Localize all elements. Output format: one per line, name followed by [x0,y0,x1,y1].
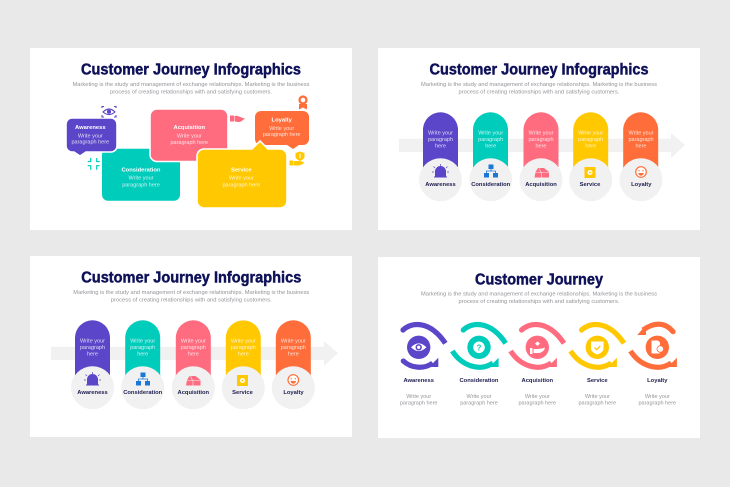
step: service: Service [580,182,601,188]
step: consideration cycle: Consideration [460,378,499,384]
title: Customer Journey [475,271,603,288]
step: service: Service [232,390,254,396]
icon: giving hand [230,116,245,122]
step: consideration: Consideration [123,390,163,396]
step: loyalty: paragraph [281,345,306,351]
subtitle: process of creating relationships with and satisfying customers. [458,299,620,305]
step: acquisition: Write your [181,339,206,345]
bubble: acquisition [150,109,228,162]
step: awareness: here [87,351,98,357]
subtitle: Marketing is the study and management of exchange relationships. Marketing is the business [72,82,310,88]
bubble: consideration [102,149,180,201]
panel: customer journey cycle arrows [378,257,700,438]
step: service: here [238,351,249,357]
subtitle: Marketing is the study and management of exchange relationships. Marketing is the business [421,292,657,298]
step: awareness: paragraph [80,345,105,351]
bubble: acquisition: paragraph here [170,140,208,146]
step: loyalty: Write your [281,339,306,345]
step: service: paragraph [578,137,603,143]
step: consideration cycle: paragraph here [460,401,498,407]
bubble: loyalty: Loyalty [272,118,293,124]
step: awareness cycle [400,325,445,407]
step: awareness: paragraph [428,137,453,143]
step: acquisition: Acquisition [178,390,210,396]
step: awareness [419,112,462,201]
step: consideration: Consideration [471,182,511,188]
bubble: loyalty [255,111,309,149]
title: Customer Journey Infographics [430,62,648,79]
title: Customer Journey Infographics [81,62,301,79]
step: consideration [469,112,512,201]
step: awareness: Write your [80,339,105,345]
step: loyalty: paragraph [628,137,654,143]
panel: pills and arrow (top right) [378,48,700,230]
bubble: awareness: Write your [78,133,103,139]
icon: focus arrows [88,158,100,170]
icon: award badge [298,95,308,110]
arrow: journey direction [399,133,685,158]
step: acquisition: paragraph [181,345,206,351]
step: acquisition: paragraph [528,137,554,143]
bubble: consideration: Consideration [122,167,161,173]
bubble: service: Service [231,167,252,173]
step: acquisition cycle: Acquisition [522,378,554,384]
step: acquisition [520,112,562,201]
step: consideration: paragraph [478,137,503,143]
step: awareness: Awareness [77,390,108,396]
bubble: loyalty: Write your [269,126,294,132]
step: service: Write your [231,339,256,345]
subtitle [421,82,657,95]
icon: eye in brackets [102,106,116,117]
bubble: service: paragraph here [222,182,260,188]
bubble: acquisition: Acquisition [174,125,206,131]
subtitle [73,290,309,303]
bubble: service [197,141,287,208]
bubble: consideration: Write your [129,176,154,182]
bubble: consideration: paragraph here [122,182,160,188]
step: acquisition: Acquisition [525,182,557,188]
icon: hand with shield [290,152,304,166]
step: loyalty: here [288,351,299,357]
step: acquisition cycle [511,325,564,407]
step: acquisition: here [188,351,199,357]
subtitle: Marketing is the study and management of exchange relationships. Marketing is the business [73,290,309,296]
arrow: journey direction [51,341,338,366]
step: loyalty cycle: paragraph here [638,401,676,407]
subtitle: process of creating relationships with and satisfying customers. [110,89,272,95]
step: service cycle: Write your [585,394,610,400]
panel: pills and arrow (bottom left) [30,256,352,437]
bubble: acquisition: Write your [177,133,202,139]
step: service: paragraph [231,345,256,351]
step: consideration: Write your [478,131,503,137]
panel: speech bubble journey [30,48,352,230]
step: consideration cycle: Write your [467,394,492,400]
step: service cycle [571,325,624,407]
step: consideration [121,320,164,409]
bubble: awareness: Awareness [75,125,106,131]
subtitle: process of creating relationships with and satisfying customers. [111,297,272,303]
step: service: Write your [578,131,603,137]
step: acquisition cycle: Write your [525,394,550,400]
step: consideration: Write your [130,339,155,345]
subtitle [421,292,657,305]
step: loyalty cycle: Loyalty [647,378,668,384]
title: Customer Journey Infographics [81,270,301,287]
bubble: awareness [66,118,117,156]
step: consideration: here [137,351,148,357]
step: loyalty: here [635,143,647,149]
step: awareness cycle: paragraph here [400,401,438,407]
step: loyalty cycle [630,324,677,407]
step: awareness: Awareness [425,182,456,188]
step: consideration cycle: ? [477,343,482,352]
step: consideration: here [485,143,496,149]
step: service [222,320,265,409]
step: loyalty cycle: Write your [645,394,670,400]
step: loyalty: Loyalty [631,182,652,188]
step: awareness cycle: Write your [406,394,431,400]
subtitle: Marketing is the study and management of exchange relationships. Marketing is the business [421,82,657,88]
step: awareness cycle: Awareness [403,378,434,384]
bubble: awareness: paragraph here [71,140,109,146]
step: loyalty: Loyalty [283,390,304,396]
bubble: loyalty: paragraph here [263,132,301,138]
step: consideration cycle [452,325,506,407]
step: loyalty: Write your [629,131,654,137]
step: service: here [585,143,596,149]
step: awareness: Write your [428,131,453,137]
bubble: service: Write your [229,176,254,182]
step: acquisition: Write your [529,131,554,137]
step: awareness: here [435,143,446,149]
step: acquisition: here [535,143,547,149]
step: acquisition cycle: paragraph here [518,401,556,407]
step: service [569,112,612,201]
step: service cycle: Service [587,378,608,384]
step: consideration: paragraph [130,345,155,351]
step: acquisition [172,320,215,409]
step: awareness [71,320,114,409]
step: loyalty [620,112,662,201]
step: loyalty [272,320,315,409]
subtitle: process of creating relationships with and satisfying customers. [458,89,620,95]
step: service cycle: paragraph here [578,401,616,407]
subtitle [72,82,310,95]
